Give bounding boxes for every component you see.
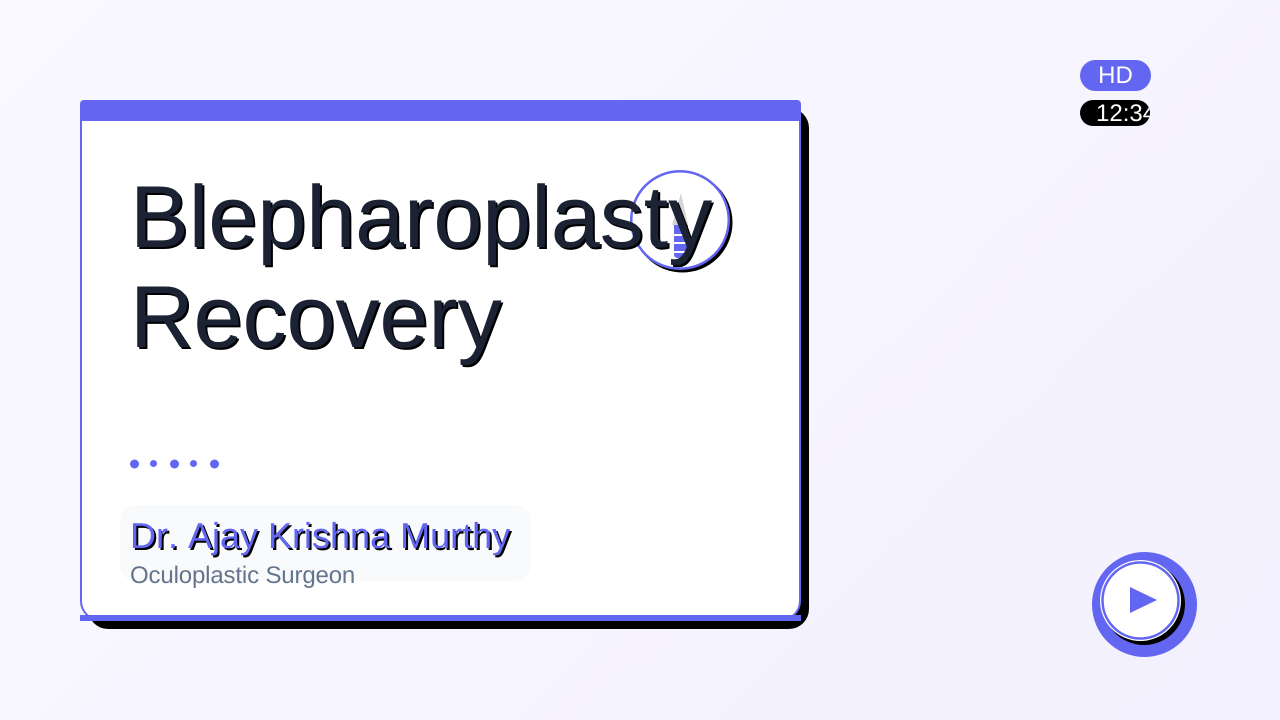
badge: HD xyxy=(1080,60,1151,91)
presenter name: Dr. Ajay Krishna Murthy xyxy=(130,515,510,556)
title xyxy=(130,167,714,368)
icon: syringe in circle xyxy=(630,170,732,272)
card panel xyxy=(80,100,809,629)
top accent bar xyxy=(80,100,801,121)
presenter role: Oculoplastic Surgeon xyxy=(130,562,355,589)
card body with shadow xyxy=(80,100,801,621)
bottom accent bar xyxy=(80,615,801,621)
decorative progress dots xyxy=(130,460,219,468)
title: Recovery xyxy=(130,267,502,366)
title: Blepharoplasty xyxy=(130,167,712,266)
badge: HD: HD xyxy=(1098,62,1133,89)
icon: play button xyxy=(1092,552,1197,657)
presenter panel xyxy=(120,505,531,581)
